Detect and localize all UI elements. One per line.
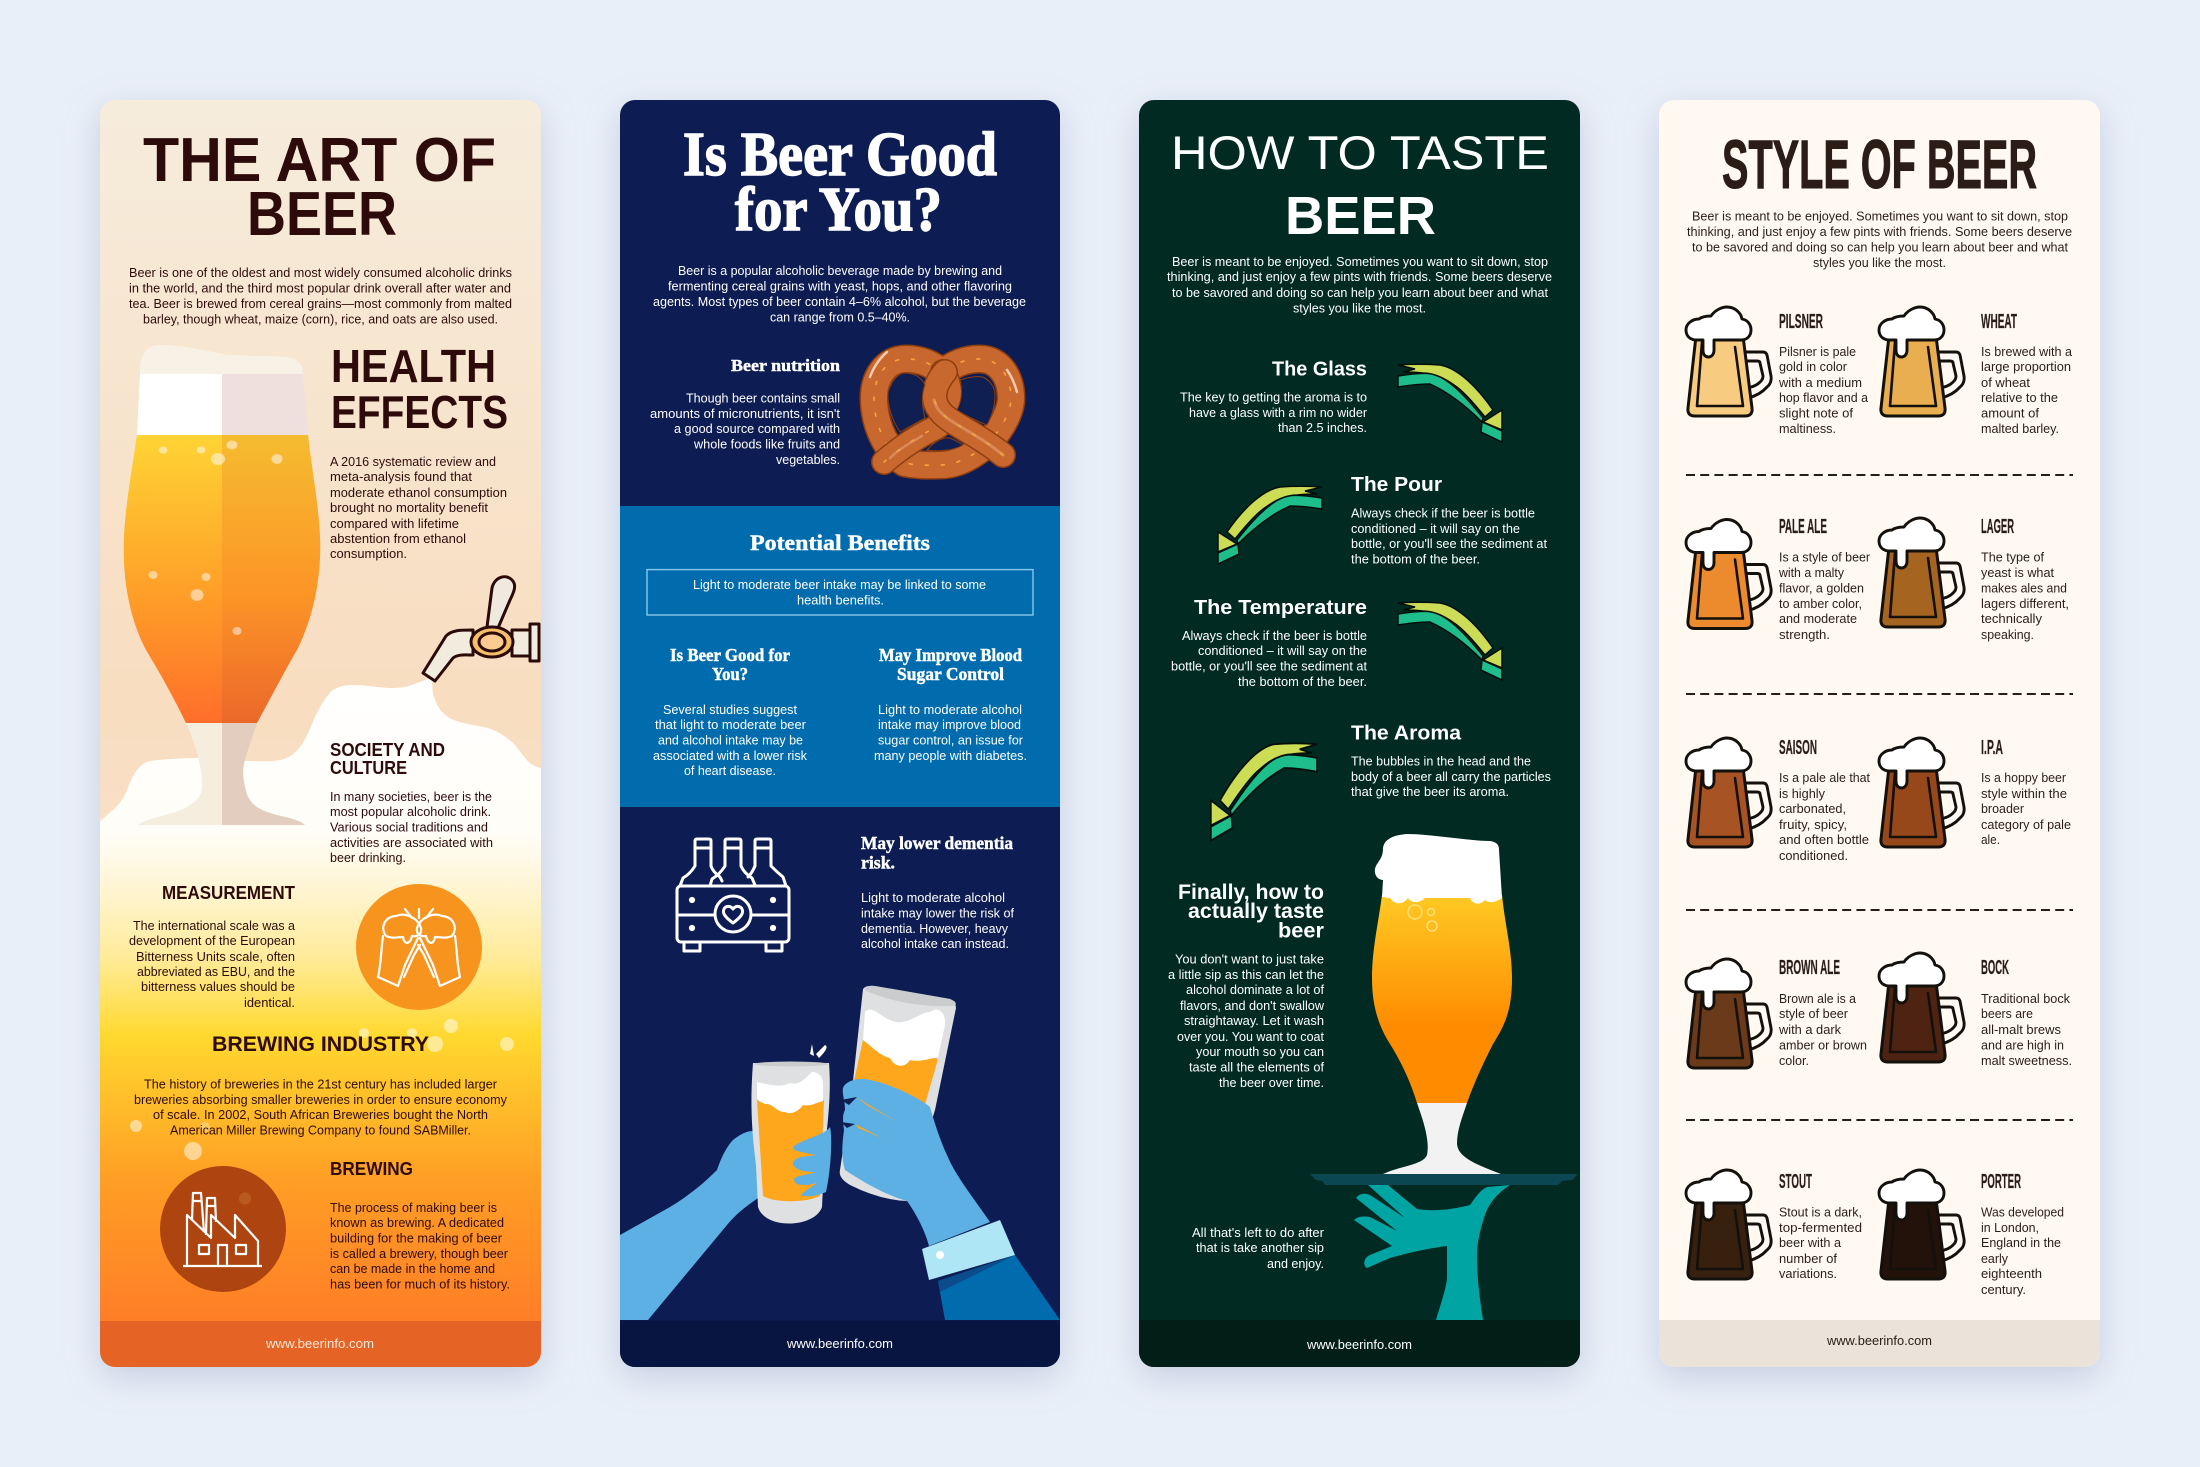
section: the aroma: body of a beer all carry the particles: [1351, 769, 1551, 784]
section: the aroma: [1351, 722, 1551, 799]
text: tasting body: taste all the elements of: [1189, 1060, 1324, 1074]
foam background shape: [100, 677, 541, 832]
panel: The Art of Beer: [100, 100, 541, 1367]
item: Pale Ale: PALE ALE: [1779, 516, 1827, 538]
item: I.P.A: I.P.A: [1981, 737, 2003, 759]
column: Is Beer Good for You: Several studies suggest: [663, 702, 797, 717]
heading: beer nutrition: Beer nutrition: [731, 356, 841, 375]
item: Wheat: Is brewed with a: [1981, 344, 2073, 359]
item: Wheat: of wheat: [1981, 375, 2030, 390]
item: Stout: number of: [1779, 1251, 1837, 1266]
heading: health effects: EFFECTS: [331, 386, 508, 438]
column: May Improve Blood Sugar Control: Light to moderate alcohol: [878, 702, 1022, 717]
illustration: beer glass on tray: [1372, 834, 1512, 1174]
illustration: small glass in left hand: [751, 1044, 831, 1224]
tray: [1310, 1174, 1578, 1185]
section: the temperature: Always check if the beer is bottle: [1182, 628, 1367, 643]
item: Lager: yeast is what: [1981, 565, 2054, 580]
item: Saison: Is a pale ale that: [1779, 770, 1870, 785]
illustration: beer glass: [124, 345, 320, 825]
item: Lager: speaking.: [1981, 627, 2034, 642]
item: Pale Ale: Is a style of beer: [1779, 549, 1871, 564]
item: Pilsner: PILSNER: [1779, 311, 1823, 333]
item: Pale Ale: to amber color,: [1779, 596, 1862, 611]
text: brewing industry body: The history of breweries in the 21st century has included larger: [144, 1076, 498, 1092]
text: measurement body: bitterness values should be: [141, 979, 295, 994]
text: closing: All that's left to do after: [1192, 1225, 1325, 1240]
column: May Improve Blood Sugar Control: Sugar Control: [897, 664, 1004, 684]
text: measurement body: Bitterness Units scale, often: [136, 949, 295, 964]
column: Is Beer Good for You: that light to moderate beer: [655, 717, 807, 732]
item: Stout: [1686, 1170, 1862, 1281]
intro text: styles you like the most.: [1813, 255, 1946, 270]
section: the temperature: conditioned – it will say on the: [1198, 643, 1367, 658]
intro text: [1167, 254, 1552, 316]
intro text: Beer is meant to be enjoyed. Sometimes you want to sit down, stop: [1172, 254, 1548, 269]
footer url: www.beerinfo.com: [1306, 1337, 1412, 1352]
item: Stout: Stout is a dark,: [1779, 1205, 1862, 1220]
text: society body: In many societies, beer is the: [330, 789, 492, 804]
item: Wheat: amount of: [1981, 406, 2039, 420]
section: the glass: The Glass: [1272, 358, 1367, 380]
item: I.P.A: Is a hoppy beer: [1981, 770, 2067, 785]
section: the temperature: bottle, or you'll see the sediment at: [1171, 659, 1367, 674]
column: May Improve Blood Sugar Control: [874, 645, 1027, 763]
text: society body: most popular alcoholic drink.: [330, 804, 491, 819]
section: the glass: The key to getting the aroma is to: [1180, 390, 1367, 404]
blue benefits band: [620, 506, 1060, 807]
heading: health effects: [331, 340, 508, 438]
intro text: to be savored and doing so can help you learn about beer and what: [1692, 240, 2068, 255]
item: Brown Ale: color.: [1779, 1053, 1809, 1068]
section: the temperature: The Temperature: [1194, 597, 1367, 619]
item: Porter: [1879, 1170, 2064, 1297]
text: brewing body: building for the making of beer: [330, 1230, 503, 1246]
item: Pale Ale: with a malty: [1778, 565, 1844, 580]
item: Porter: in London,: [1981, 1220, 2039, 1235]
text: measurement body: identical.: [244, 995, 295, 1010]
heading: lower dementia: May lower dementia: [861, 833, 1013, 853]
heading: society and culture: [330, 739, 445, 778]
column: Is Beer Good for You: and alcohol intake may be: [658, 733, 803, 748]
item: Wheat: WHEAT: [1981, 311, 2017, 333]
item: Bock: beers are: [1981, 1006, 2033, 1021]
text: brewing industry body: American Miller Brewing Company to found SABMiller.: [170, 1123, 471, 1138]
item: Pale Ale: [1686, 516, 1871, 642]
section: the aroma: The bubbles in the head and the: [1351, 754, 1531, 769]
intro text: thinking, and just enjoy a few pints with friends. Some beers deserve: [1687, 224, 2072, 239]
item: Saison: conditioned.: [1779, 848, 1848, 863]
section: the aroma: that give the beer its aroma.: [1351, 784, 1509, 799]
intro text: barley, though wheat, maize (corn), rice, and oats are also used.: [143, 312, 498, 327]
item: Bock: [1879, 953, 2072, 1068]
column: Is Beer Good for You: associated with a lower risk: [653, 748, 807, 763]
footer bar: [1139, 1320, 1580, 1367]
arrow: glass to pour: [1398, 364, 1502, 442]
text: society body: beer drinking.: [330, 850, 406, 865]
callout box: [647, 570, 1033, 615]
intro text: agents. Most types of beer contain 4–6% alcohol, but the beverage: [653, 294, 1026, 309]
heading: finally how to taste: Finally, how to: [1178, 881, 1324, 904]
text: health effects body: consumption.: [330, 546, 407, 561]
item: Porter: PORTER: [1981, 1171, 2021, 1193]
heading: finally how to taste: beer: [1278, 920, 1324, 943]
section: the pour: conditioned – it will say on the: [1351, 521, 1520, 536]
footer bar: [1659, 1320, 2100, 1367]
item: Saison: and often bottle: [1779, 832, 1869, 847]
text: tasting body: straightaway. Let it wash: [1184, 1013, 1324, 1028]
text: measurement body: The international scale was a: [133, 918, 296, 933]
icon: cheers glasses in orange circle: [356, 884, 482, 1010]
intro text: [129, 265, 512, 327]
text: lower dementia body: intake may lower the risk of: [861, 906, 1014, 921]
item: Stout: top-fermented: [1779, 1220, 1862, 1235]
item: Brown Ale: BROWN ALE: [1779, 957, 1840, 979]
item: Pale Ale: and moderate: [1779, 611, 1857, 626]
illustration: sleeve: [938, 1255, 1060, 1320]
title: HOW TO TASTE: [1171, 126, 1549, 179]
text: health effects body: meta-analysis found that: [330, 469, 472, 484]
column: Is Beer Good for You: You?: [712, 664, 748, 684]
item: Pilsner: with a medium: [1778, 375, 1862, 390]
item: Porter: eighteenth: [1981, 1266, 2042, 1281]
text: health effects body: A 2016 systematic review and: [330, 454, 496, 469]
item: Lager: technically: [1981, 611, 2042, 626]
text: society body: [330, 789, 493, 865]
item: I.P.A: category of pale: [1981, 817, 2071, 832]
column: May Improve Blood Sugar Control: many people with diabetes.: [874, 748, 1027, 763]
text: measurement body: abbreviated as EBU, and the: [137, 964, 295, 979]
item: Saison: SAISON: [1779, 737, 1817, 759]
column: Is Beer Good for You: [653, 645, 807, 778]
section: the pour: The Pour: [1351, 474, 1442, 496]
footer bar: [100, 1321, 541, 1367]
item: Bock: BOCK: [1981, 957, 2009, 979]
item: Pilsner: maltiness.: [1779, 421, 1836, 436]
item: Bock: and are high in: [1981, 1038, 2064, 1053]
text: society body: Various social traditions and: [330, 820, 488, 835]
title: [683, 121, 997, 244]
item: I.P.A: [1879, 737, 2071, 847]
item: Bock: malt sweetness.: [1981, 1053, 2072, 1068]
intro text: Beer is one of the oldest and most widely consumed alcoholic drinks: [129, 265, 512, 280]
icon: beer tap: [423, 577, 539, 681]
arrow: aroma to tasting: [1211, 743, 1317, 840]
section: the aroma: The Aroma: [1351, 722, 1462, 744]
item: Pale Ale: strength.: [1779, 627, 1830, 642]
item: Stout: beer with a: [1779, 1235, 1842, 1250]
text: health effects body: compared with lifetime: [330, 516, 459, 531]
arrow: temperature to aroma: [1398, 602, 1502, 680]
text: beer nutrition body: whole foods like fruits and: [693, 436, 840, 452]
title: [143, 126, 496, 249]
item: Brown Ale: with a dark: [1778, 1022, 1841, 1037]
item: Saison: [1686, 737, 1870, 863]
column: May Improve Blood Sugar Control: sugar control, an issue for: [878, 733, 1024, 748]
footer url: www.beerinfo.com: [1826, 1333, 1932, 1348]
illustration: serving hand: [1354, 1185, 1510, 1320]
item: Porter: century.: [1981, 1282, 2026, 1297]
intro text: Beer is a popular alcoholic beverage made by brewing and: [678, 263, 1002, 278]
footer bar: [620, 1320, 1060, 1368]
section: the glass: [1180, 358, 1368, 435]
item: Lager: The type of: [1981, 549, 2044, 564]
section: the temperature: the bottom of the beer.: [1238, 674, 1367, 689]
intro text: can range from 0.5–40%.: [770, 309, 910, 324]
illustration: large glass in right hand: [840, 986, 1015, 1280]
item: Wheat: [1879, 307, 2073, 436]
item: Pilsner: slight note of: [1779, 406, 1853, 420]
item: Stout: variations.: [1779, 1266, 1837, 1281]
text: tasting body: your mouth so you can: [1196, 1044, 1324, 1059]
illustration: pretzel: [870, 352, 1017, 465]
intro text: fermenting cereal grains with yeast, hops, and other flavoring: [668, 279, 1012, 294]
text: tasting body: a little sip as this can let the: [1168, 967, 1324, 982]
intro text: to be savored and doing so can help you learn about beer and what: [1172, 285, 1548, 300]
text: health effects body: abstention from ethanol: [330, 531, 466, 546]
item: Lager: makes ales and: [1981, 581, 2067, 596]
heading: lower dementia: [861, 833, 1013, 872]
intro text: Beer is meant to be enjoyed. Sometimes you want to sit down, stop: [1692, 208, 2068, 224]
section: the glass: than 2.5 inches.: [1278, 420, 1367, 435]
text: tasting body: over you. You want to coat: [1177, 1029, 1324, 1044]
text: lower dementia body: Light to moderate alcohol: [861, 890, 1005, 905]
item: Pilsner: Pilsner is pale: [1779, 344, 1856, 359]
arrow: pour to temperature: [1218, 486, 1322, 564]
section: the pour: Always check if the beer is bottle: [1351, 505, 1535, 520]
item: Porter: early: [1981, 1251, 2008, 1266]
text: measurement body: [129, 918, 296, 1010]
item: Porter: Was developed: [1981, 1205, 2064, 1220]
text: beer nutrition body: a good source compared with: [674, 421, 840, 436]
item: Brown Ale: amber or brown: [1779, 1038, 1867, 1053]
text: brewing industry body: of scale. In 2002, South African Breweries bought the North: [153, 1107, 488, 1122]
section: the pour: [1351, 474, 1547, 566]
heading: finally how to taste: [1178, 881, 1324, 943]
column: May Improve Blood Sugar Control: intake may improve blood: [878, 717, 1021, 732]
item: Porter: England in the: [1981, 1235, 2061, 1250]
heading: lower dementia: risk.: [861, 852, 895, 872]
text: brewing body: [330, 1200, 510, 1292]
item: I.P.A: broader: [1981, 801, 2025, 816]
text: tasting body: the beer over time.: [1219, 1075, 1324, 1090]
panel: Style of Beer: [1659, 100, 2100, 1367]
text: health effects body: moderate ethanol consumption: [330, 485, 507, 500]
text: beer nutrition body: [650, 390, 840, 467]
text: lower dementia body: dementia. However, heavy: [861, 921, 1008, 936]
item: Pilsner: hop flavor and a: [1779, 390, 1869, 405]
item: Lager: [1879, 516, 2069, 642]
title: THE ART OF: [143, 126, 496, 195]
footer url: www.beerinfo.com: [265, 1336, 374, 1351]
item: Pilsner: gold in color: [1779, 359, 1848, 374]
item: Pilsner: [1686, 307, 1869, 436]
text: tasting body: You don't want to just take: [1175, 952, 1324, 966]
heading: brewing industry: BREWING INDUSTRY: [212, 1032, 429, 1056]
heading: society and culture: CULTURE: [330, 757, 407, 778]
text: brewing body: is called a brewery, though beer: [330, 1246, 509, 1261]
text: beer nutrition body: Though beer contains small: [686, 390, 840, 405]
text: tasting body: flavors, and don't swallow: [1180, 998, 1324, 1013]
intro text: [653, 263, 1026, 324]
text: beer nutrition body: amounts of micronutrients, it isn't: [650, 406, 840, 421]
decorative bubbles: [130, 1019, 514, 1160]
column: Is Beer Good for You: Is Beer Good for: [670, 645, 790, 665]
intro text: thinking, and just enjoy a few pints with friends. Some beers deserve: [1167, 269, 1552, 284]
text: measurement body: development of the European: [129, 933, 295, 948]
text: brewing body: can be made in the home and: [330, 1261, 495, 1276]
text: brewing industry body: breweries absorbing smaller breweries in order to ensure economy: [134, 1092, 507, 1107]
intro text: tea. Beer is brewed from cereal grains—most commonly from malted: [129, 296, 512, 311]
intro text: styles you like the most.: [1293, 301, 1426, 316]
column: May Improve Blood Sugar Control: May Improve Blood: [879, 645, 1022, 665]
item: Pale Ale: flavor, a golden: [1779, 581, 1864, 596]
illustration: left arm: [620, 1131, 758, 1320]
heading: finally how to taste: actually taste: [1188, 900, 1324, 923]
title: BEER: [1285, 186, 1436, 246]
icon: brewery in brown circle: [160, 1166, 286, 1292]
item: Brown Ale: [1686, 957, 1867, 1068]
section: the glass: have a glass with a rim no wider: [1189, 405, 1368, 420]
heading: brewing: BREWING: [330, 1158, 413, 1179]
heading: society and culture: SOCIETY AND: [330, 739, 445, 760]
heading: potential benefits: Potential Benefits: [750, 530, 930, 555]
text: tasting body: [1168, 952, 1324, 1090]
item: I.P.A: style within the: [1981, 786, 2067, 801]
text: health effects body: [330, 454, 507, 561]
callout box: Light to moderate beer intake may be linked to some: [693, 577, 986, 592]
item: Bock: Traditional bock: [1981, 991, 2070, 1006]
item: Wheat: relative to the: [1981, 390, 2058, 405]
section: the temperature: [1171, 597, 1367, 689]
title: for You?: [735, 176, 942, 244]
title: [1171, 126, 1549, 246]
text: closing: [1192, 1225, 1325, 1271]
item: Wheat: malted barley.: [1981, 421, 2059, 436]
column: Is Beer Good for You: of heart disease.: [684, 763, 776, 778]
text: tasting body: alcohol dominate a lot of: [1186, 982, 1324, 997]
item: Wheat: large proportion: [1981, 359, 2071, 374]
text: brewing body: The process of making beer is: [330, 1200, 497, 1215]
heading: health effects: HEALTH: [331, 340, 496, 392]
panel: How to Taste Beer: [1139, 100, 1580, 1367]
text: society body: activities are associated with: [330, 835, 493, 850]
panel: Is Beer Good for You: [620, 100, 1060, 1368]
item: Brown Ale: Brown ale is a: [1779, 991, 1857, 1006]
section: the pour: the bottom of the beer.: [1351, 552, 1480, 566]
text: beer nutrition body: vegetables.: [776, 452, 840, 467]
text: lower dementia body: [861, 890, 1014, 951]
heading: measurement: MEASUREMENT: [162, 882, 296, 903]
icon: bottle crate: [677, 839, 789, 951]
callout box: health benefits.: [797, 592, 884, 608]
text: health effects body: brought no mortality benefit: [330, 500, 488, 515]
section: the pour: bottle, or you'll see the sediment at: [1351, 536, 1547, 551]
text: brewing body: known as brewing. A dedicated: [330, 1215, 504, 1230]
text: brewing body: has been for much of its history.: [330, 1276, 510, 1292]
intro text: [1687, 208, 2072, 270]
text: closing: and enjoy.: [1267, 1256, 1324, 1271]
item: Stout: STOUT: [1779, 1171, 1812, 1193]
footer url: www.beerinfo.com: [786, 1336, 893, 1351]
item: Lager: LAGER: [1981, 516, 2014, 538]
title: BEER: [247, 180, 397, 249]
item: Brown Ale: style of beer: [1779, 1006, 1849, 1021]
item: Lager: lagers different,: [1981, 596, 2069, 611]
text: lower dementia body: alcohol intake can instead.: [861, 936, 1009, 951]
item: Saison: fruity, spicy,: [1779, 817, 1847, 832]
item: Bock: all-malt brews: [1981, 1022, 2061, 1037]
title: Is Beer Good: [683, 121, 997, 189]
item: I.P.A: ale.: [1981, 832, 2000, 847]
text: closing: that is take another sip: [1196, 1240, 1324, 1255]
intro text: in the world, and the third most popular drink overall after water and: [129, 281, 511, 296]
item: Saison: carbonated,: [1779, 801, 1846, 816]
item: Saison: is highly: [1779, 786, 1825, 801]
text: brewing industry body: [134, 1076, 507, 1138]
